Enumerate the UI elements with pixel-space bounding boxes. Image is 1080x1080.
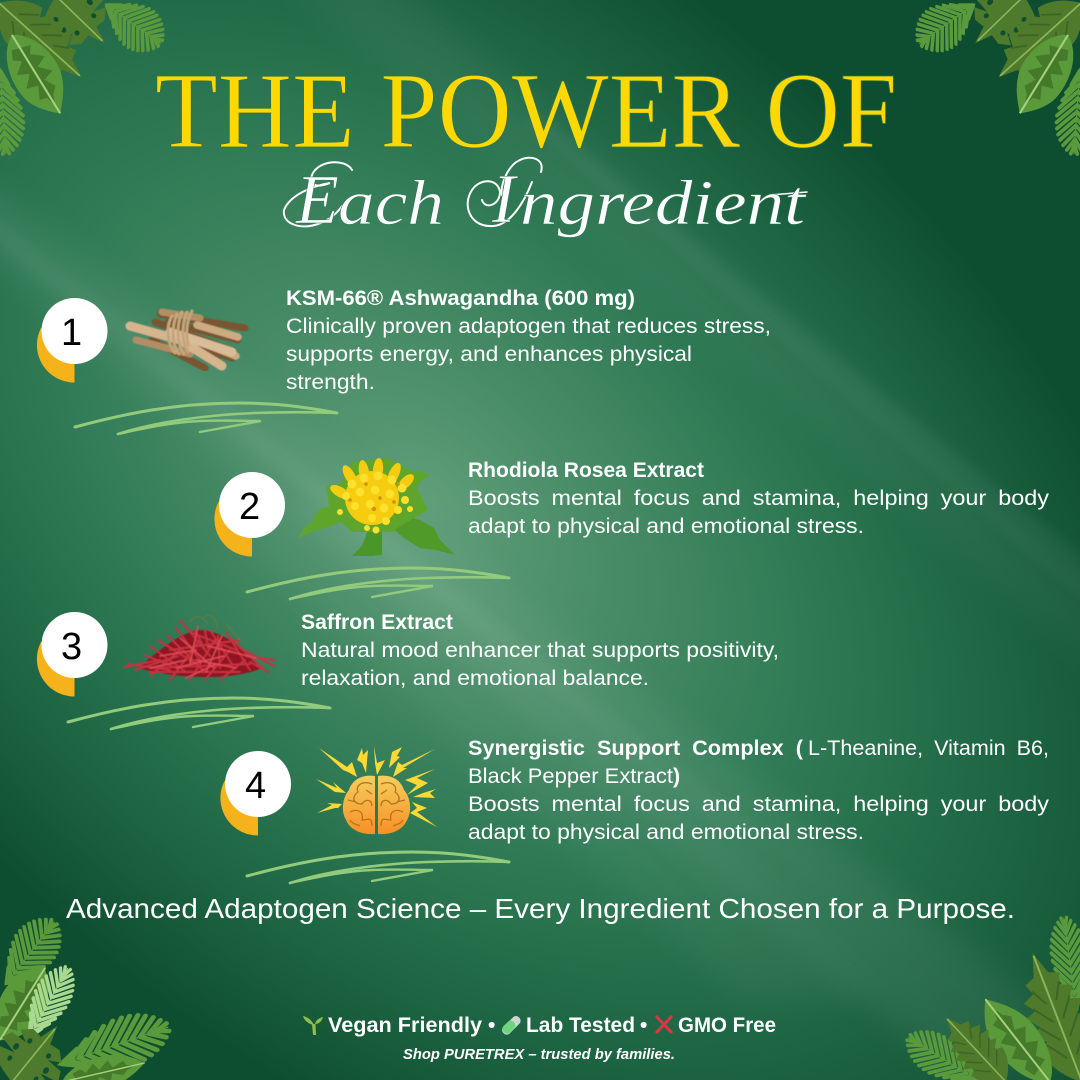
icon: rhodiola flower — [298, 458, 455, 556]
number badge 4: 4 — [245, 765, 266, 807]
heading and description: strength. — [286, 370, 375, 394]
heading and description: Natural mood enhancer that supports positivity, — [301, 638, 779, 662]
heading and description: L-Theanine, Vitamin B6, — [808, 736, 1049, 760]
footer badges: • — [640, 1014, 647, 1037]
heading and description — [301, 610, 779, 690]
item 4: Synergistic complex — [220, 736, 1049, 883]
heading and description: Synergistic Support Complex ( — [468, 736, 804, 760]
title — [155, 52, 897, 239]
corner foliage: bottom left — [0, 909, 175, 1080]
heading and description: Boosts mental focus and stamina, helping your body — [468, 486, 1049, 510]
title: ach — [338, 167, 444, 238]
heading and description: adapt to physical and emotional stress. — [468, 820, 864, 844]
number badge 2 — [214, 472, 285, 557]
footer badges: • — [488, 1014, 495, 1037]
brush stroke divider — [247, 852, 509, 883]
brush stroke divider — [68, 698, 330, 729]
number badge 3: 3 — [61, 626, 82, 668]
footer badges: Lab Tested — [526, 1013, 635, 1037]
item 2: Rhodiola — [214, 458, 1049, 599]
footer badges: Vegan Friendly — [328, 1013, 482, 1037]
heading and description — [468, 458, 1049, 538]
brush stroke divider — [247, 568, 509, 599]
icon: seedling — [303, 1016, 323, 1035]
number badge 1 — [37, 298, 108, 383]
heading and description: adapt to physical and emotional stress. — [468, 514, 864, 538]
title: E — [295, 162, 339, 239]
corner foliage: top left — [0, 0, 173, 155]
title: I — [491, 161, 519, 238]
heading and description: ) — [673, 764, 680, 788]
footer badges — [303, 1013, 776, 1037]
heading and description: Clinically proven adaptogen that reduces stress, — [286, 314, 771, 338]
corner foliage: top right — [907, 0, 1080, 155]
heading and description: Boosts mental focus and stamina, helping your body — [468, 792, 1049, 816]
heading and description: Saffron Extract — [301, 610, 453, 634]
icon: brain with lightning — [316, 746, 437, 834]
heading and description: KSM-66® Ashwagandha (600 mg) — [286, 286, 635, 310]
number badge 2: 2 — [239, 486, 260, 528]
heading and description — [468, 736, 1049, 844]
heading and description — [286, 286, 771, 394]
footer badges: GMO Free — [678, 1013, 776, 1037]
title: THE POWER OF — [155, 52, 897, 171]
item 1: Ashwagandha — [37, 286, 771, 434]
icon: test tube — [500, 1014, 522, 1036]
item 3: Saffron — [37, 610, 779, 729]
icon: ashwagandha roots — [130, 311, 245, 368]
title: ngredient — [520, 167, 808, 238]
heading and description: Rhodiola Rosea Extract — [468, 458, 704, 482]
heading and description: relaxation, and emotional balance. — [301, 666, 649, 690]
tagline: Advanced Adaptogen Science – Every Ingredient Chosen for a Purpose. — [66, 893, 1015, 924]
icon: red cross — [656, 1016, 672, 1033]
brush stroke divider — [75, 403, 337, 434]
number badge 1: 1 — [61, 312, 82, 354]
icon: saffron threads — [124, 615, 275, 680]
number badge 4 — [220, 751, 291, 836]
heading and description: supports energy, and enhances physical — [286, 342, 692, 366]
heading and description: Black Pepper Extract — [468, 764, 673, 788]
number badge 3 — [37, 612, 107, 697]
corner foliage: bottom right — [899, 916, 1080, 1080]
shop line: Shop PURETREX – trusted by families. — [403, 1047, 675, 1063]
